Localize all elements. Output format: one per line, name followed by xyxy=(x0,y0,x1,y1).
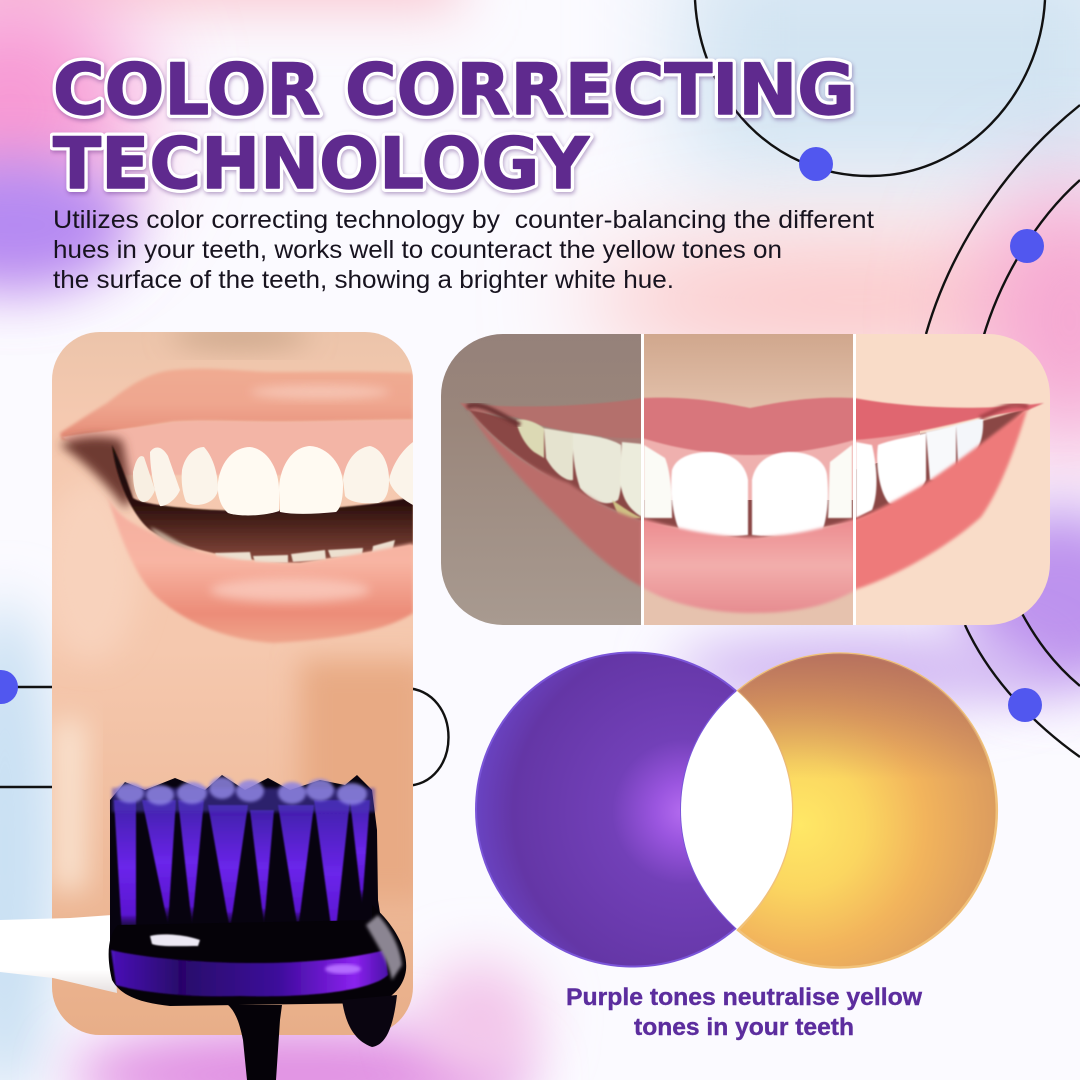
caption xyxy=(566,984,923,1041)
description text xyxy=(53,206,874,294)
teeth xyxy=(516,418,983,536)
white overlap centre xyxy=(681,691,792,929)
gums xyxy=(600,425,920,500)
paste on brush head xyxy=(109,905,406,1080)
yellow lens xyxy=(738,654,997,967)
purple lens xyxy=(476,652,736,966)
caption: Purple tones neutralise yellow xyxy=(566,984,923,1011)
description text: hues in your teeth, works well to counteract the yellow tones on xyxy=(53,236,782,264)
description text: Utilizes color correcting technology by counter-balancing the different xyxy=(53,206,874,234)
lower lip xyxy=(467,407,1028,613)
upper lip xyxy=(460,398,1044,455)
description text: the surface of the teeth, showing a brighter white hue. xyxy=(53,266,674,294)
panel: close-up photo of smile xyxy=(52,332,413,1035)
bristles xyxy=(110,775,385,950)
mouth interior xyxy=(467,407,1028,540)
toothbrush handle xyxy=(0,915,117,993)
title: COLOR CORRECTING xyxy=(53,49,855,131)
title: COLOR CORRECTING xyxy=(53,49,855,131)
panel: before and after smile comparison photo xyxy=(441,334,1050,625)
caption: tones in your teeth xyxy=(634,1014,854,1041)
title xyxy=(50,49,858,198)
